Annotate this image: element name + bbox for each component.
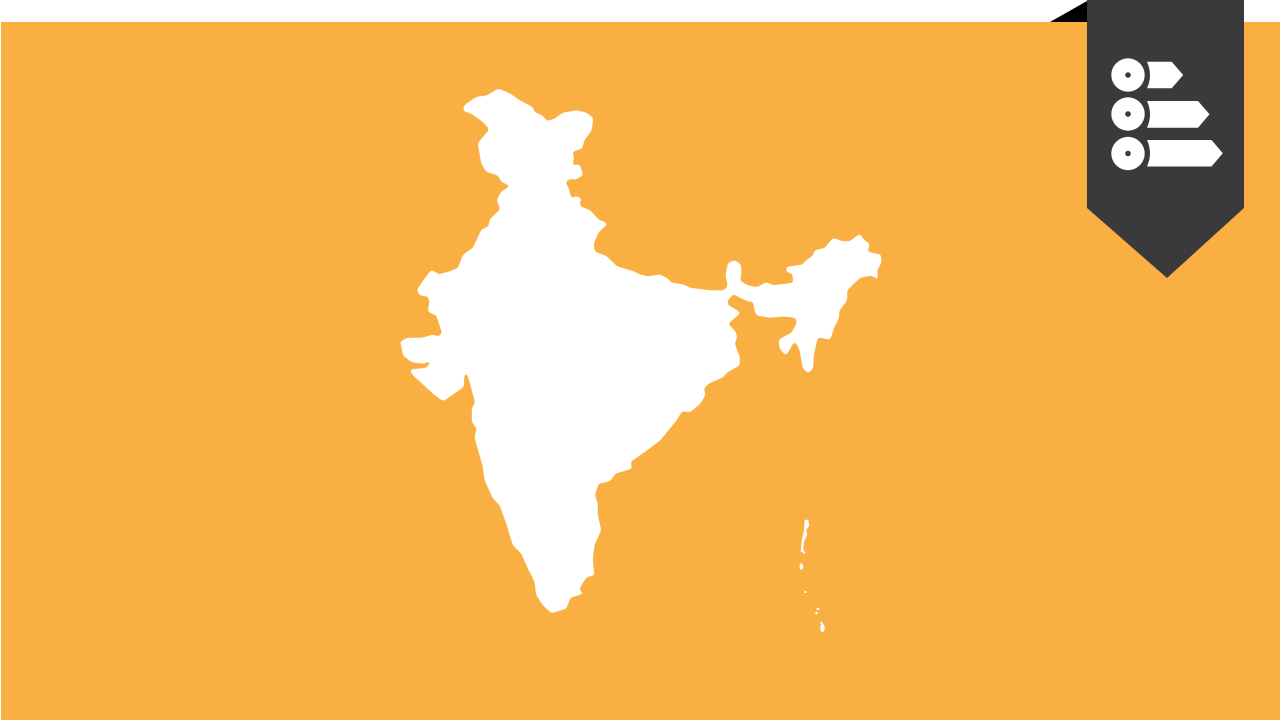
row 2 <box>1111 97 1210 131</box>
mainland India <box>400 89 881 613</box>
row 1 <box>1111 58 1183 92</box>
Nicobar and small islands <box>800 551 825 632</box>
bookmark ribbon badge <box>1050 0 1244 278</box>
row 3 <box>1111 137 1223 170</box>
ribbon fold <box>1050 1 1087 22</box>
map of India <box>400 89 881 632</box>
icon: list of arrows with discs <box>1111 58 1223 170</box>
Andaman islands <box>801 520 809 552</box>
ribbon body <box>1087 0 1244 278</box>
